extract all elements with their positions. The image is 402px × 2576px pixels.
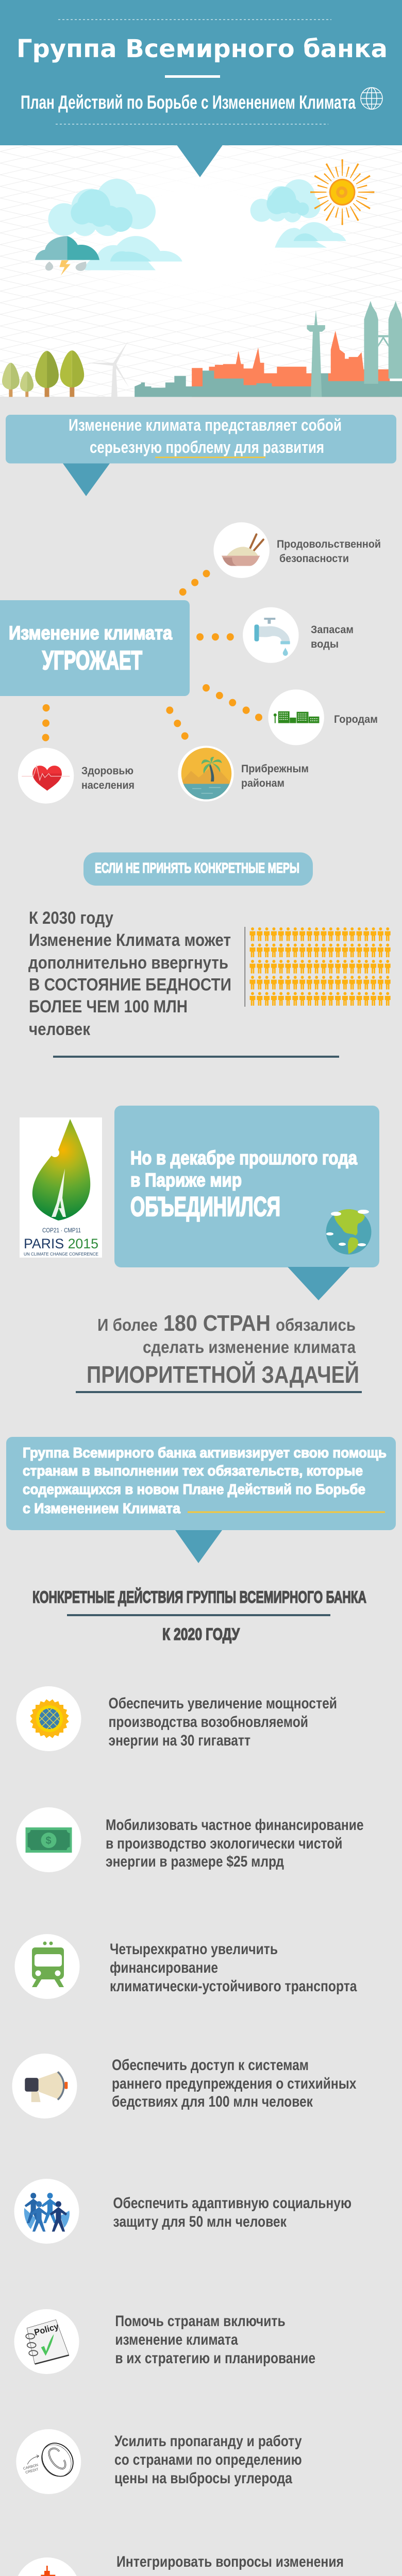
action 5: social protection: Обеспечить адаптивную социальную	[113, 2195, 351, 2212]
panel: World Bank Group support: Группа Всемирного банка активизирует свою помощь	[23, 1445, 387, 1461]
dashed rule top	[58, 19, 331, 20]
logo: COP21 Paris 2015: PARIS 2015	[24, 1236, 98, 1251]
callout: without concrete measures	[83, 852, 313, 886]
panel: Paris agreement	[114, 1106, 379, 1300]
label: food security	[277, 538, 381, 565]
text block: 180 countries: ПРИОРИТЕТНОЙ ЗАДАЧЕЙ	[87, 1361, 359, 1388]
icon: banknote: $	[45, 1835, 52, 1846]
action 4: early warning: бедствиях для 100 млн человек	[112, 2093, 313, 2110]
text block: 180 countries: обязались	[276, 1315, 356, 1334]
action 5: social protection	[14, 2179, 351, 2244]
skyline: teal buildings	[135, 370, 402, 397]
callout: without concrete measures: ЕСЛИ НЕ ПРИНЯТЬ КОНКРЕТНЫЕ МЕРЫ	[95, 860, 299, 876]
label: public health	[81, 765, 135, 791]
logo: COP21 Paris 2015	[20, 1117, 102, 1258]
header panel	[0, 0, 402, 177]
action 6: policy: изменение климата	[115, 2331, 238, 2348]
action 7: carbon pricing: цены на выбросы углерода	[114, 2470, 292, 2487]
label: cities: Городам	[334, 714, 378, 725]
text block: 180 countries: И более	[97, 1315, 158, 1334]
action 3: transport	[14, 1934, 357, 1999]
heading: by 2020: К 2020 ГОДУ	[162, 1625, 240, 1643]
text block: poverty 2030: К 2030 году	[29, 908, 113, 928]
icon: paper people	[24, 2193, 70, 2232]
label: public health: населения	[81, 779, 135, 791]
panel: climate change is a development problem	[6, 415, 396, 496]
action 4: early warning: Обеспечить доступ к системам	[112, 2057, 309, 2074]
action 4: early warning	[12, 2054, 357, 2119]
text block: poverty 2030	[28, 908, 231, 1039]
text block: poverty 2030: человек	[29, 1020, 91, 1039]
panel: Paris agreement: в Париже мир	[130, 1170, 242, 1191]
action 2: private finance: в производство экологически чистой	[106, 1835, 342, 1852]
skyline: orange buildings	[192, 331, 390, 397]
action 6: policy	[14, 2309, 315, 2374]
icon: earth	[326, 1209, 371, 1255]
Eiffel tower	[52, 1168, 66, 1217]
label: water supply	[311, 624, 354, 650]
label: water supply: воды	[311, 638, 339, 650]
banner text: Изменение климата представляет собой	[69, 416, 342, 434]
icon: banknote	[26, 1827, 72, 1853]
panel: climate change is a development problem: серьезную проблему для развития	[90, 438, 324, 456]
label: coastal areas: Прибрежным	[241, 763, 309, 775]
panel pointer	[175, 1530, 222, 1563]
orange connector dots	[42, 570, 262, 741]
leaf	[32, 1119, 90, 1221]
logo: COP21 Paris 2015: UN CLIMATE CHANGE CONFERENCE	[24, 1251, 98, 1257]
icon: carbon credit coin: CREDIT	[25, 2468, 39, 2475]
chart: 100 people pictogram	[244, 927, 391, 1007]
icon: wind turbine	[87, 341, 129, 397]
panel: climate change threatens: УГРОЖАЕТ	[42, 646, 142, 675]
title underline	[165, 75, 220, 78]
icon: solar sun	[30, 1699, 69, 1738]
icon: rice bowl	[213, 522, 270, 578]
icon: water tap	[243, 607, 299, 663]
action 3: transport: климатически-устойчивого транспорта	[110, 1978, 357, 1995]
label: food security: безопасности	[279, 553, 349, 565]
action 1: renewable energy: энергии на 30 гигаватт	[108, 1732, 250, 1749]
panel: World Bank Group support: содержащихся в новом Плане Действий по Борьбе	[23, 1481, 365, 1497]
icon: globe	[361, 88, 382, 109]
panel: Paris agreement: ОБЪЕДИНИЛСЯ	[130, 1192, 280, 1222]
banner pointer	[63, 464, 110, 496]
text block: poverty 2030: Изменение Климата может	[29, 930, 231, 950]
action 7: carbon pricing: Усилить пропаганду и работу	[114, 2433, 302, 2450]
icon: sun	[319, 167, 366, 217]
label: coastal areas	[241, 763, 309, 789]
action 2: private finance	[16, 1807, 364, 1872]
action 4: early warning: раннего предупреждения о стихийных	[112, 2075, 357, 2092]
sky background	[0, 139, 402, 397]
icon: buildings	[26, 2566, 70, 2576]
label: public health: Здоровью	[81, 765, 133, 777]
action 1: renewable energy: Обеспечить увеличение мощностей	[108, 1695, 337, 1712]
panel pointer	[288, 1267, 350, 1300]
text block: 180 countries: 180 СТРАН	[163, 1311, 271, 1336]
header pointer	[177, 145, 223, 177]
action 2: private finance: энергии в размере $25 млрд	[106, 1853, 284, 1870]
text block: poverty 2030: В СОСТОЯНИЕ БЕДНОСТИ	[29, 975, 231, 994]
logo: COP21 Paris 2015: COP21 · CMP11	[42, 1227, 81, 1234]
action 8: urban planning	[15, 2553, 348, 2576]
icon: palm beach	[178, 745, 234, 802]
panel: climate change threatens: Изменение климата	[9, 622, 172, 643]
cloud: lower left	[85, 236, 182, 270]
action 7: carbon pricing: со странами по определению	[114, 2451, 302, 2468]
cloud: upper left	[48, 179, 156, 236]
skyline: observation tower	[307, 310, 325, 397]
label: coastal areas: районам	[241, 777, 284, 789]
text block: 180 countries: сделать изменение климата	[143, 1337, 356, 1357]
action 3: transport: Четырехкратно увеличить	[110, 1941, 278, 1958]
panel: World Bank Group support: с Изменением Климата	[23, 1500, 180, 1516]
panel: World Bank Group support	[6, 1437, 396, 1563]
icon: heart	[18, 748, 74, 804]
yellow underline	[155, 456, 265, 458]
icon: carbon credit coin	[23, 2437, 79, 2482]
dashed rule bottom	[56, 124, 328, 125]
icon: megaphone	[25, 2071, 68, 2102]
cloud: lower right	[275, 222, 346, 248]
yellow rule	[188, 1512, 385, 1513]
skyline: twin towers	[364, 301, 402, 384]
label: water supply: Запасам	[311, 624, 354, 636]
title: Группа Всемирного банка	[16, 35, 388, 63]
action 3: transport: финансирование	[110, 1959, 218, 1976]
label: food security: Продовольственной	[277, 538, 381, 550]
action 6: policy: Помочь странам включить	[115, 2313, 286, 2330]
icon: policy notebook	[26, 2320, 69, 2365]
trees	[2, 350, 84, 397]
icon: policy notebook: Policy	[33, 2321, 60, 2337]
panel: Paris agreement: Но в декабре прошлого года	[130, 1147, 357, 1168]
text block: poverty 2030: дополнительно ввергнуть	[28, 953, 228, 973]
action 6: policy: в их стратегию и планирование	[115, 2350, 315, 2367]
icon: carbon credit coin: CARBON	[23, 2463, 39, 2471]
hero illustration	[2, 167, 402, 397]
icon: storm cloud	[35, 236, 99, 276]
icon: train	[32, 1941, 64, 1987]
action 7: carbon pricing	[16, 2429, 302, 2494]
action 8: urban planning: Интегрировать вопросы изменения	[116, 2553, 344, 2570]
action 1: renewable energy: производства возобновляемой	[108, 1714, 308, 1731]
text block: 180 countries	[87, 1311, 359, 1388]
action 5: social protection: защиту для 50 млн человек	[113, 2213, 287, 2230]
icon: city	[268, 689, 324, 745]
cloud: upper right	[250, 179, 321, 223]
action 1: renewable energy	[16, 1686, 337, 1751]
panel: World Bank Group support: странам в выполнении тех обязательств, которые	[23, 1463, 363, 1479]
panel: climate change threatens	[0, 600, 190, 696]
text block: poverty 2030: БОЛЕЕ ЧЕМ 100 МЛН	[29, 997, 188, 1016]
